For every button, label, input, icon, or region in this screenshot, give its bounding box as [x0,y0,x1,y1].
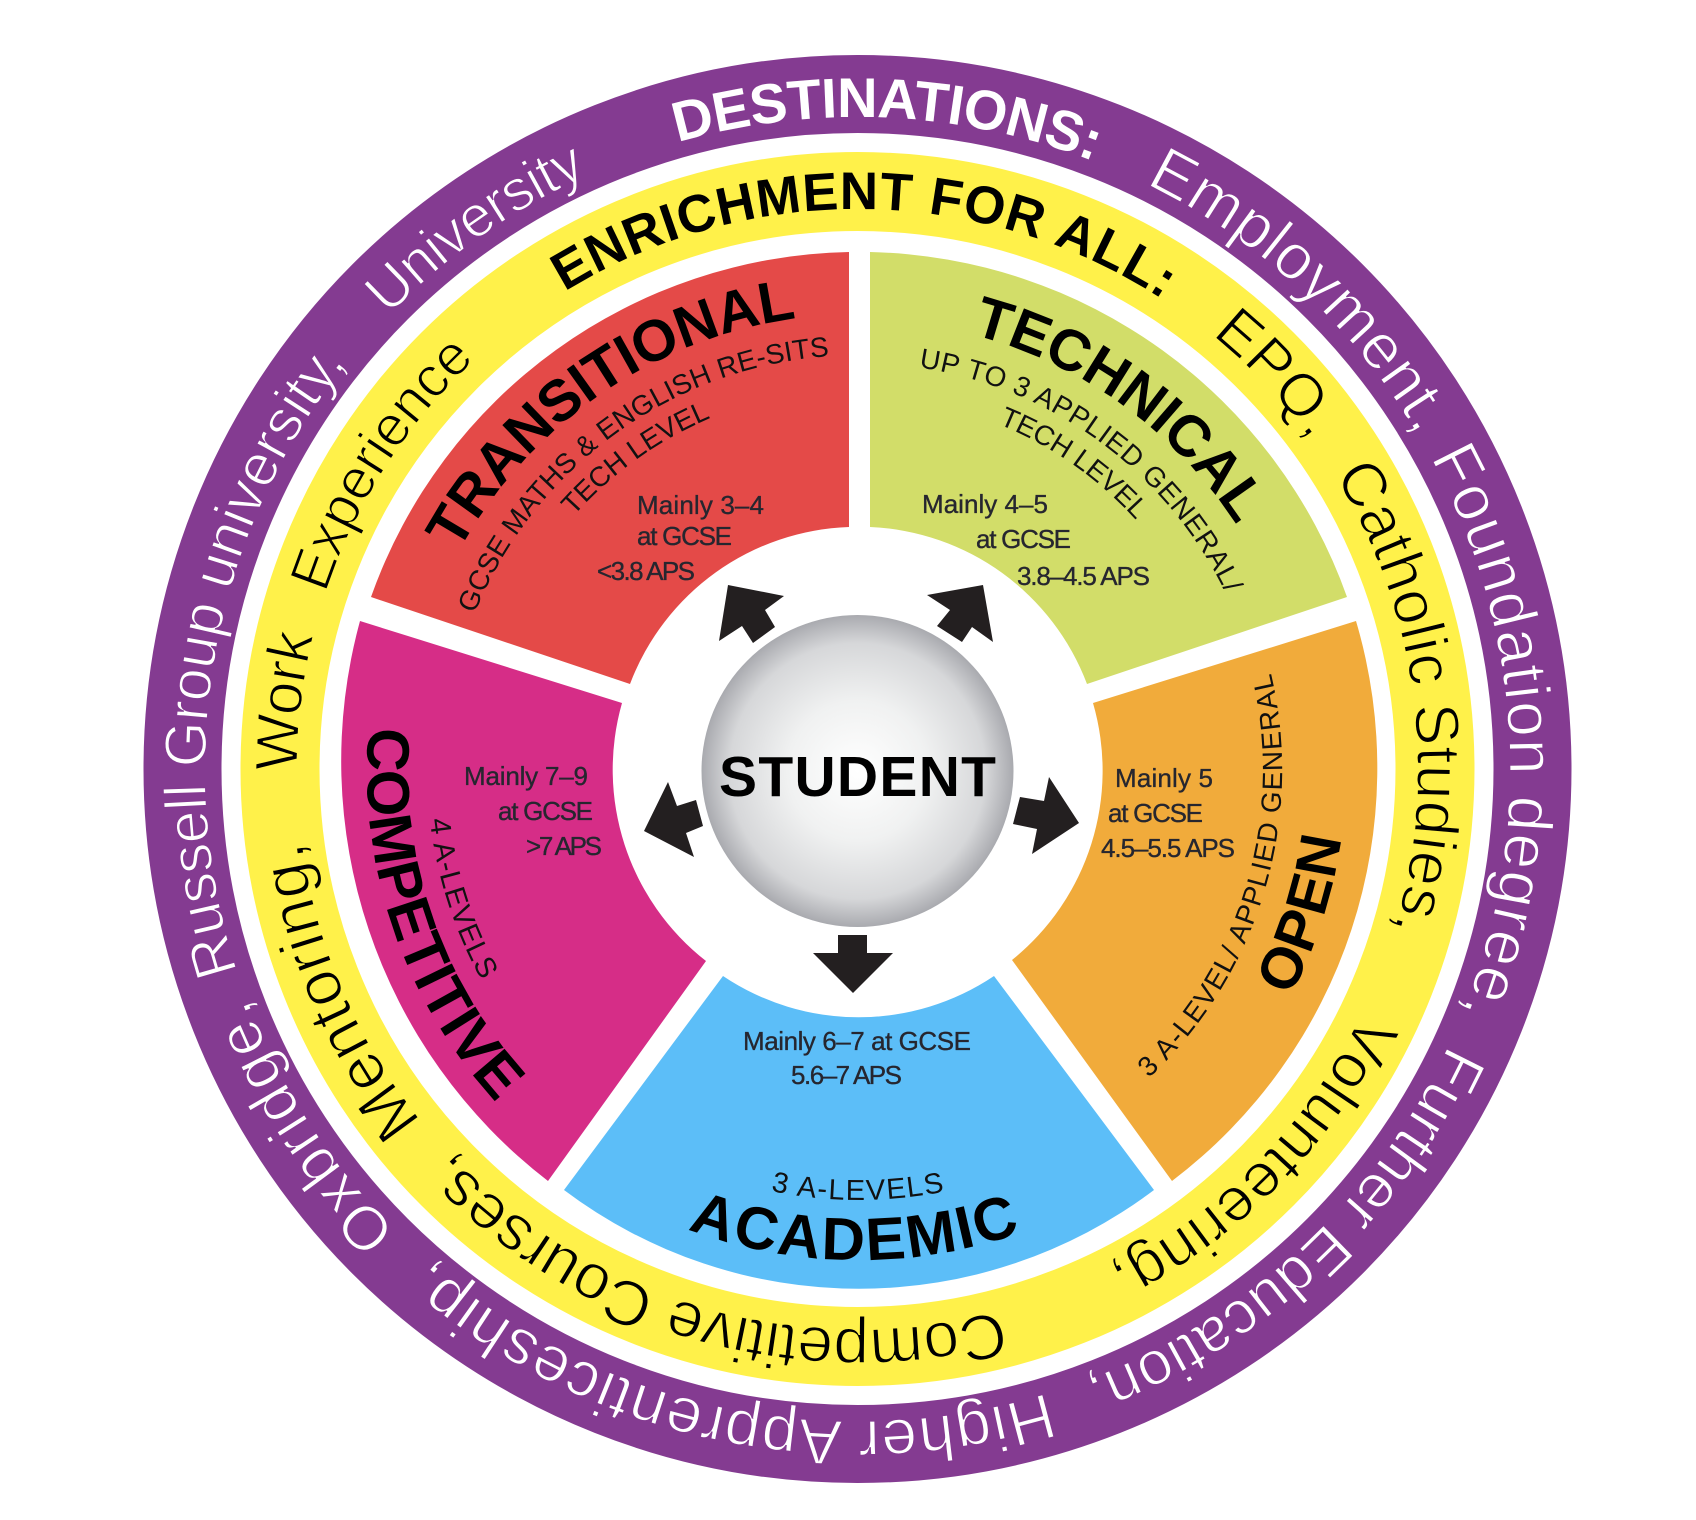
grades note [1101,763,1235,863]
panel: transitional segment [371,252,849,684]
arrow: to open [1013,777,1079,854]
grades note: at GCSE [637,521,732,551]
grades note: at GCSE [976,524,1071,554]
yellow ring [280,192,1435,1346]
grades note: 4.5–5.5 APS [1101,833,1235,863]
enrichment: catholic studies: Catholic Studies, [1343,464,1460,926]
panel: open segment [1012,621,1378,1181]
enrichment: work: Work [256,632,312,769]
grades note [597,490,764,586]
orange sector [1012,621,1377,1181]
arrow: to transitional [719,585,784,643]
grades note: >7 APS [526,831,602,861]
grades note [922,489,1150,591]
arrow: to technical [927,585,993,642]
student sphere [702,615,1014,927]
panel: academic segment [564,976,1154,1289]
course line: A-level / applied general: 3 A-LEVEL/ APPLIED GENERAL [1138,674,1282,1076]
destination: oxbridge: Oxbridge, [229,1003,387,1250]
course line: GCSE re-sits: GCSE MATHS & ENGLISH RE-SITS [460,337,828,610]
panel: competitive segment [341,621,706,1181]
panel: technical segment [870,252,1347,684]
grades note: Mainly 7–9 [464,761,588,791]
magenta sector [341,621,706,1181]
course line: tech level: TECH LEVEL [560,404,710,511]
segment title: open: OPEN [1261,835,1341,989]
course line: tech level: TECH LEVEL [1005,406,1143,520]
heading: enrichment for all: ENRICHMENT FOR ALL: [550,172,1172,297]
heading: destinations: DESTINATIONS: [672,78,1098,160]
panel: enrichment ring [240,152,1474,1386]
destination: further education: Further Education, [1090,1050,1484,1400]
destination: university: University [364,148,576,306]
grades note: Mainly 4–5 [922,489,1048,519]
segment title: academic: ACADEMIC [688,1195,1016,1260]
arrow: to competitive [644,782,703,857]
grades note: at GCSE [498,796,593,826]
grades note: 5.6–7 APS [791,1060,902,1090]
red sector [371,252,849,684]
grades note [464,761,602,861]
grades note: <3.8 APS [597,556,695,586]
enrichment: experience: Experience [291,345,469,588]
grades note: Mainly 6–7 at GCSE [743,1026,971,1056]
purple ring [182,94,1532,1444]
grades note [743,1026,971,1090]
segment title: competitive: COMPETITIVE [366,730,526,1102]
destination: higher apprenticeship: Higher Apprenticeship, [430,1260,1054,1464]
grades note: Mainly 3–4 [637,490,764,520]
destination: russell group university: Russell Group university, [164,356,348,978]
destination: foundation degree: Foundation degree, [1434,442,1554,1009]
course line: applied general: UP TO 3 APPLIED GENERAL/ [922,348,1244,589]
course line: 4 A-levels: 4 A-LEVELS [431,819,496,978]
label: student: STUDENT [719,745,996,809]
course line: 3 A-levels: 3 A-LEVELS [772,1172,942,1200]
grades note: Mainly 5 [1115,763,1213,793]
green sector [870,252,1347,684]
segment title: technical: TECHNICAL [982,296,1256,524]
blue sector [564,976,1154,1289]
segment title: transitional: TRANSITIONAL [424,282,795,540]
grades note: 3.8–4.5 APS [1017,561,1150,591]
destination: employment: Employment, [1151,148,1438,432]
enrichment: competitive courses: Competitive Courses, [444,1154,1003,1368]
enrichment: EPQ: EPQ, [1216,308,1323,438]
enrichment: volunteering: Volunteering, [1113,1030,1399,1286]
enrichment: mentoring: Mentoring, [273,848,418,1142]
arrow: to academic [813,935,893,993]
panel: destinations outer ring [144,55,1572,1483]
grades note: at GCSE [1108,798,1203,828]
